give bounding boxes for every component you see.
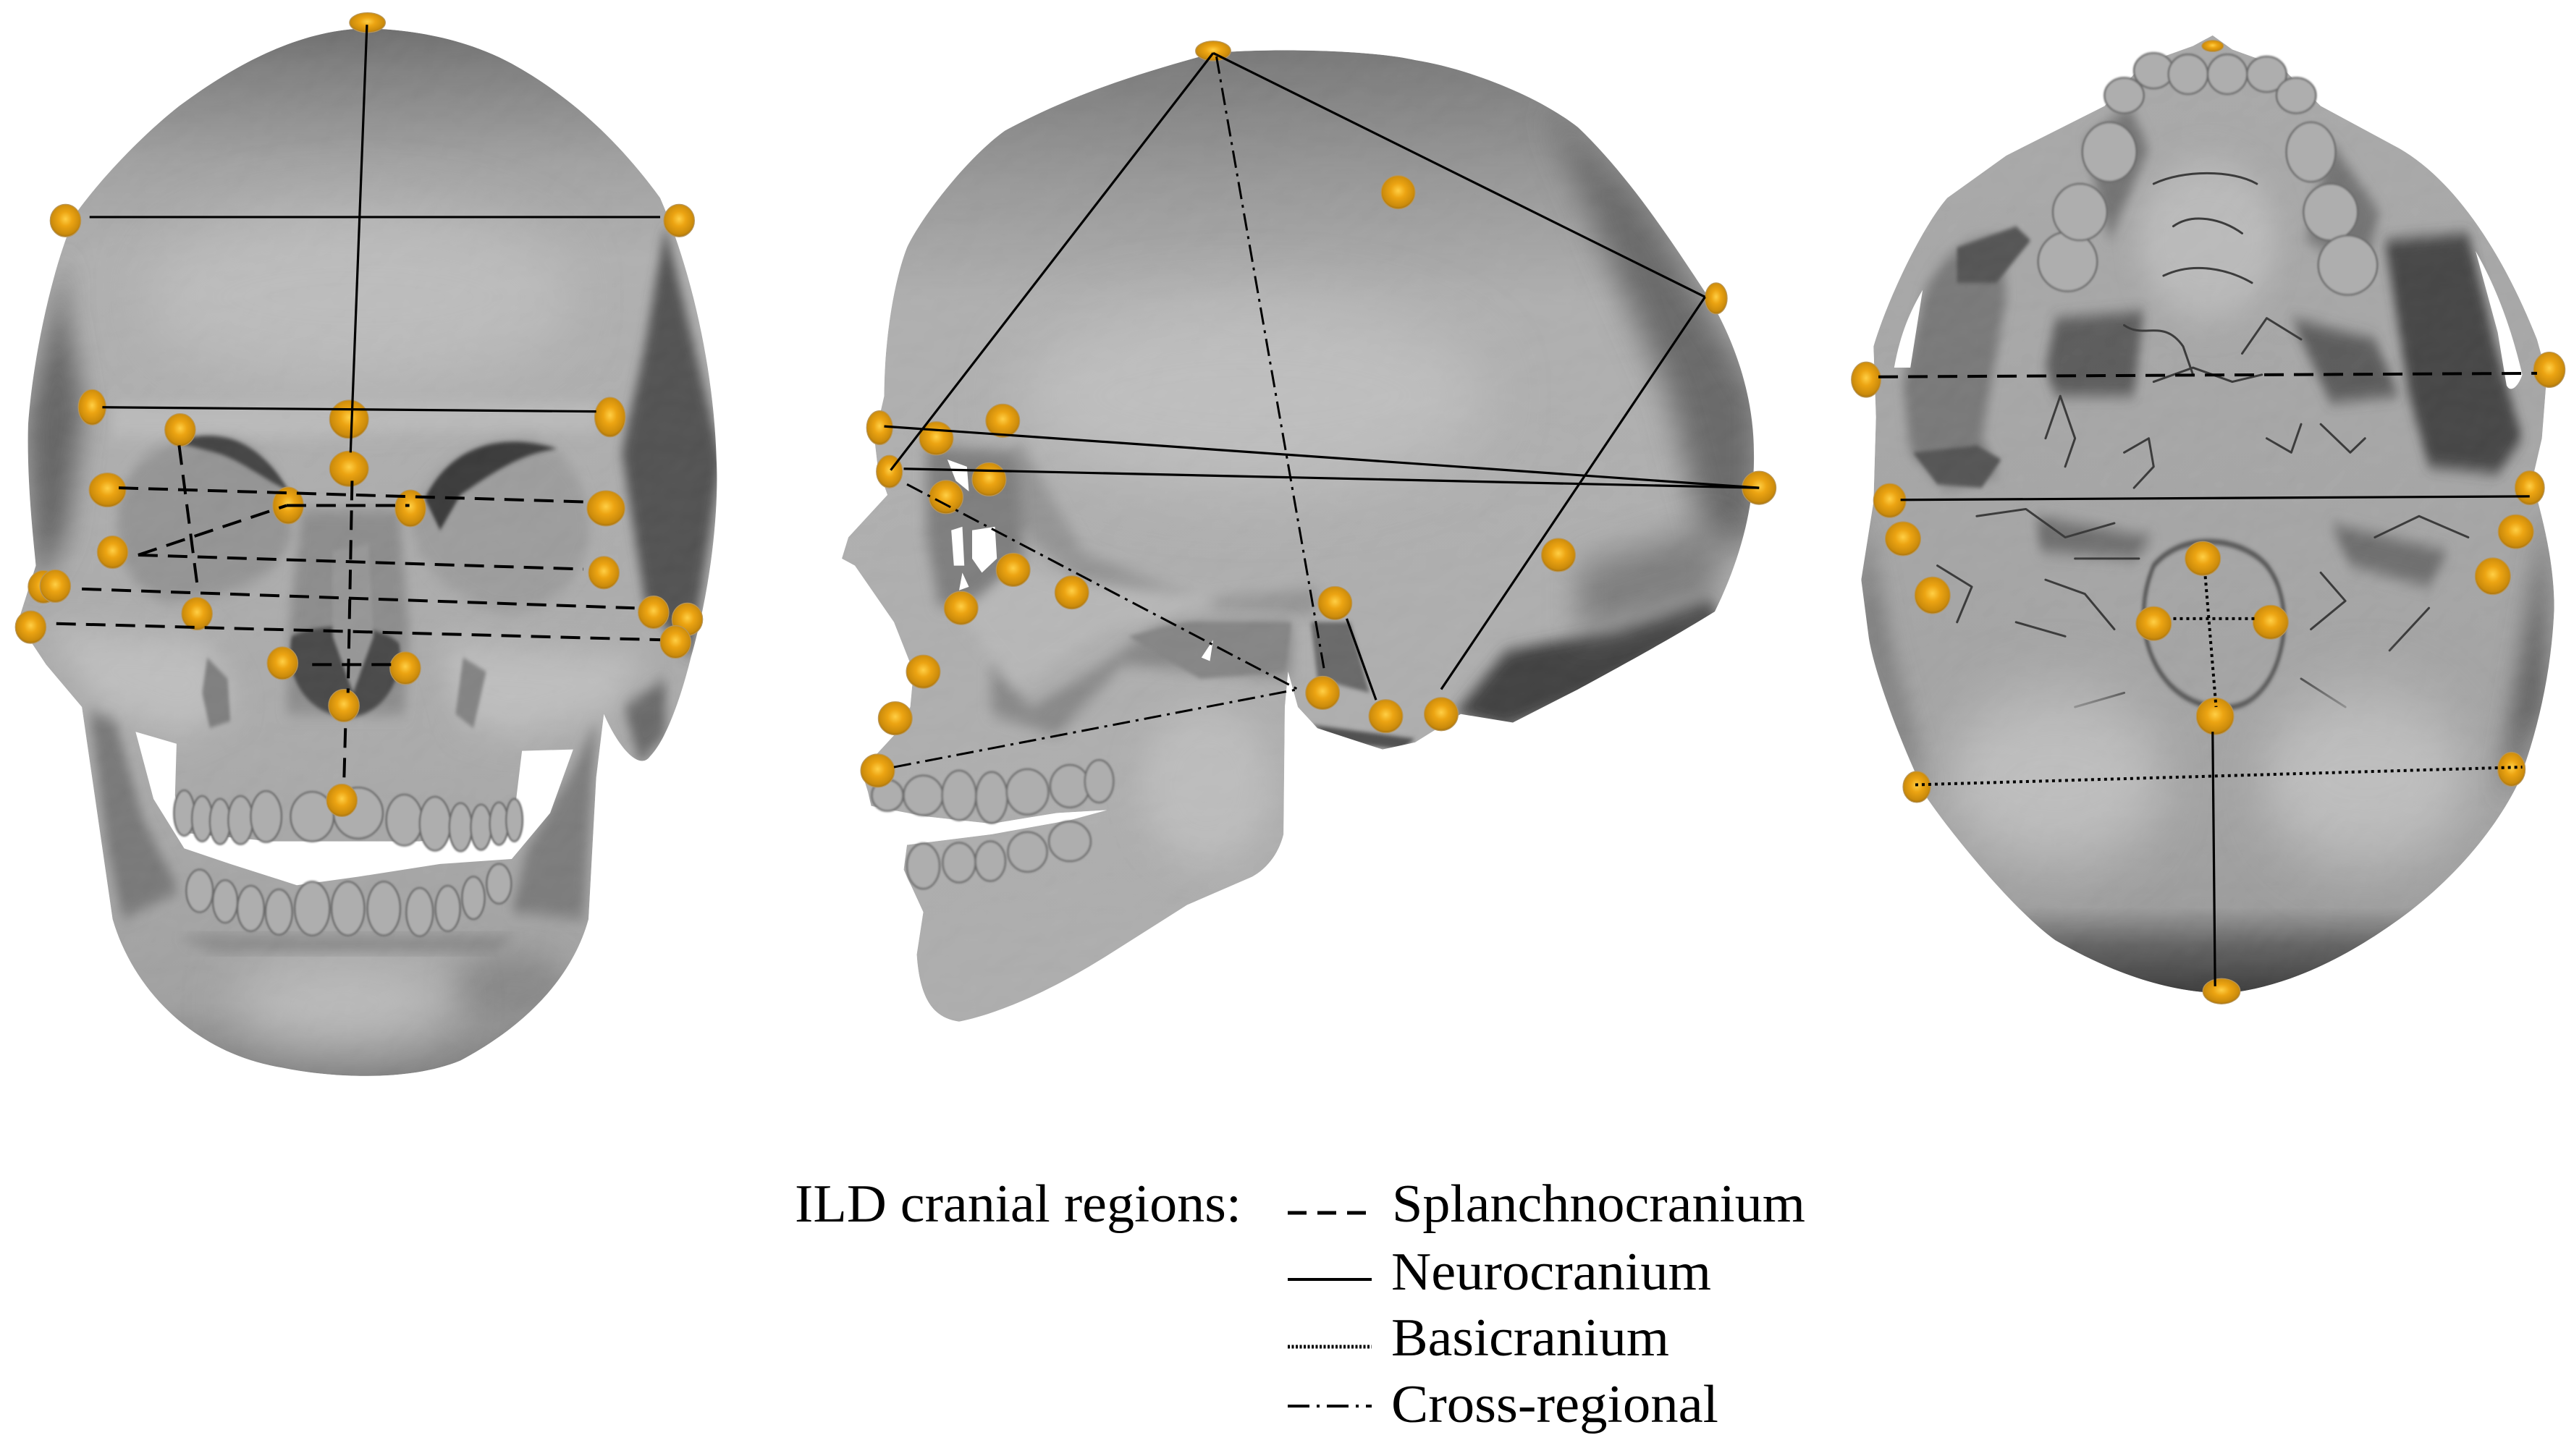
legend key: splanchnocranium: Splanchnocranium: [1392, 1174, 1805, 1234]
basal landmarks: [1852, 41, 2565, 1004]
basal neurocranium lines: [1901, 496, 2530, 986]
skull: basal view: [1852, 28, 2565, 1004]
lateral neurocranium lines: [885, 53, 1759, 700]
legend key: neurocranium: Neurocranium: [1391, 1243, 1711, 1302]
basal skull silhouette, shading and fossae: [1859, 28, 2557, 1004]
basal teeth arch: [2038, 53, 2377, 295]
front skull silhouette and shading: [0, 0, 727, 1089]
upper teeth: [174, 787, 523, 851]
lateral skull silhouette and shading: [842, 51, 1755, 1022]
basal splanchnocranium line: [1878, 373, 2537, 377]
zygomatic arch gaps: [1894, 251, 2523, 389]
legend key: cross-regional: Cross-regional: [1391, 1375, 1718, 1434]
basal bone creases: [1938, 173, 2468, 707]
legend: [795, 1174, 1805, 1434]
front splanchnocranium lines: [56, 446, 660, 784]
skull: front view: [0, 0, 727, 1089]
lateral skull base: [842, 50, 1754, 1022]
legend key: basicranium: Basicranium: [1391, 1308, 1669, 1368]
front skull base: [18, 28, 717, 1076]
basal basicranium lines: [1915, 576, 2523, 784]
mouth opening gap: [135, 732, 573, 885]
lower teeth: [186, 864, 511, 936]
front neurocranium lines: [90, 25, 660, 452]
skull: lateral view: [796, 0, 1776, 1032]
lateral cross-regional lines: [894, 56, 1324, 767]
lateral upper and lower teeth: [872, 760, 1113, 889]
front landmarks: [15, 13, 703, 816]
lateral landmarks: [861, 41, 1776, 787]
basal skull base: [1861, 35, 2554, 994]
eye-socket and nasal openings: [948, 460, 1213, 661]
legend title: ILD cranial regions:: [795, 1174, 1241, 1234]
